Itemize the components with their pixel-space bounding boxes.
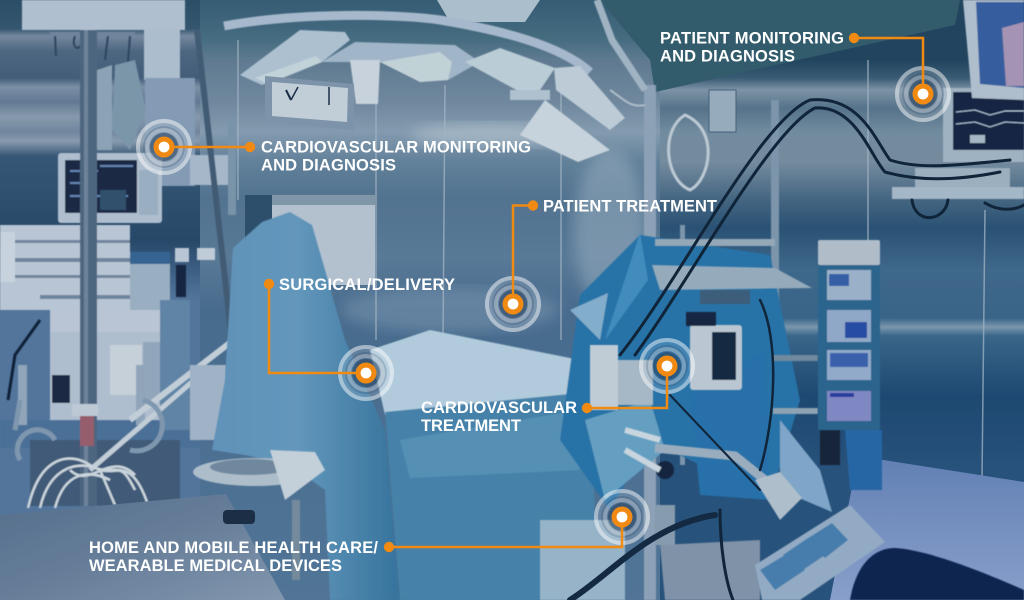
ceiling bbox=[600, 0, 960, 92]
medical console lower right bbox=[755, 505, 1024, 600]
cables bbox=[570, 100, 1024, 600]
white wall panel bbox=[245, 195, 376, 285]
floor bbox=[830, 456, 1024, 600]
surgical lights bbox=[224, 15, 625, 162]
hotspot: cardiovascular monitoring and diagnosis bbox=[136, 119, 531, 175]
hotspot: patient monitoring and diagnosis bbox=[660, 30, 951, 122]
central bed with drapes bbox=[370, 233, 832, 600]
hotspot: surgical/delivery bbox=[264, 276, 455, 401]
infusion pump, flowmeter and instrument rack bbox=[540, 239, 818, 600]
label: cardiovascular monitoring and diagnosis: CARDIOVASCULAR MONITORING bbox=[261, 138, 531, 156]
label: cardiovascular treatment: TREATMENT bbox=[421, 417, 521, 435]
left steel table bbox=[0, 494, 285, 600]
hotspot: home and mobile health care / wearable medical devices bbox=[89, 489, 650, 575]
left equipment tower bbox=[0, 0, 240, 508]
vertical monitoring display stack bbox=[818, 240, 882, 490]
top right monitors bbox=[892, 0, 1024, 199]
label: cardiovascular monitoring and diagnosis: AND DIAGNOSIS bbox=[261, 156, 396, 174]
label: home and mobile health care / wearable medical devices: HOME AND MOBILE HEALTH CARE/ bbox=[89, 539, 378, 557]
wall clock bbox=[265, 76, 354, 130]
label: patient monitoring and diagnosis: PATIENT MONITORING bbox=[660, 30, 844, 48]
instrument poles and IV coil bbox=[228, 0, 779, 600]
label: patient treatment: PATIENT TREATMENT bbox=[543, 198, 717, 216]
wall vent bbox=[709, 90, 736, 132]
label: surgical/delivery: SURGICAL/DELIVERY bbox=[279, 276, 455, 294]
hotspot: patient treatment bbox=[485, 198, 717, 332]
label: cardiovascular treatment: CARDIOVASCULAR bbox=[421, 399, 577, 417]
label: patient monitoring and diagnosis: AND DIAGNOSIS bbox=[660, 48, 795, 66]
label: home and mobile health care / wearable medical devices: WEARABLE MEDICAL DEVICES bbox=[89, 557, 342, 575]
hotspot: cardiovascular treatment bbox=[421, 338, 695, 435]
steel bowl on stand bbox=[193, 450, 325, 580]
left surgical drape bbox=[212, 212, 400, 600]
